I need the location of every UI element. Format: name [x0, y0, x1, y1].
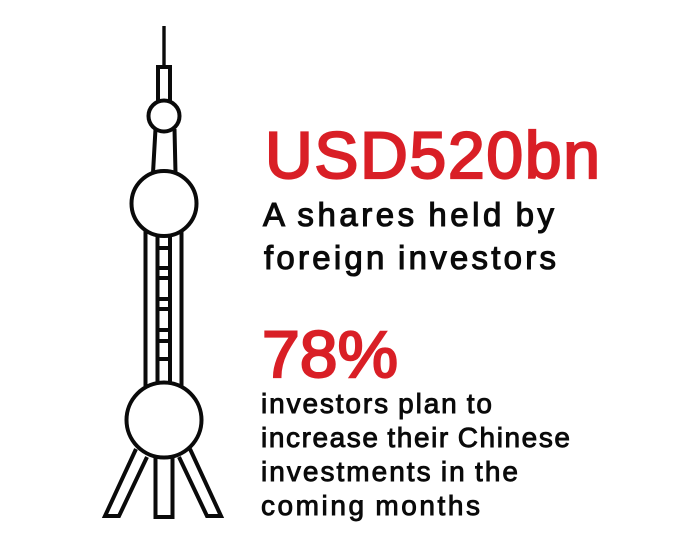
small sphere — [148, 100, 180, 132]
text block: investor plans description — [261, 388, 570, 521]
text block: investor plans description: investments in the — [261, 456, 518, 487]
headline stat: USD520bn: USD520bn — [265, 118, 600, 192]
tripod legs — [105, 449, 221, 517]
text block: A shares description — [263, 196, 556, 276]
spire — [162, 26, 166, 67]
upper antenna mast — [158, 67, 170, 102]
middle sphere — [132, 171, 196, 236]
text block: investor plans description: investors plan to — [261, 388, 492, 419]
headline stat: 78%: 78% — [262, 317, 398, 391]
text block: investor plans description: coming months — [261, 490, 480, 521]
text block: A shares description: foreign investors — [264, 239, 556, 276]
icon: Oriental Pearl Tower — [105, 26, 221, 517]
outer columns — [146, 226, 182, 392]
text block: investor plans description: increase their Chinese — [261, 422, 570, 453]
text block: A shares description: A shares held by — [263, 196, 554, 233]
neck between small and middle spheres — [153, 129, 176, 173]
lower sphere — [126, 382, 202, 458]
central shaft with rungs — [157, 232, 170, 387]
